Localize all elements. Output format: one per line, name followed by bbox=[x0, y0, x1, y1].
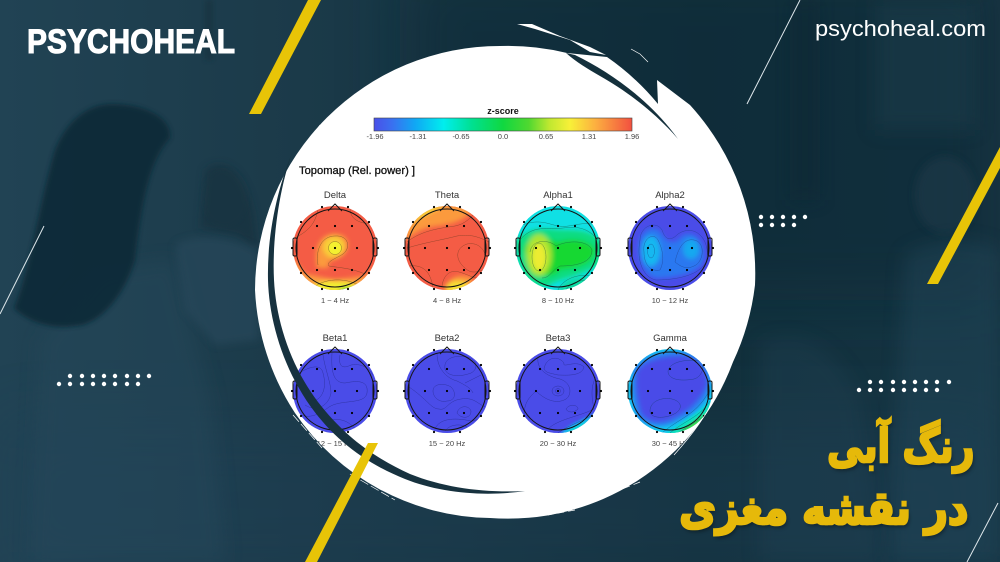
head: Gamma: 30 ~ 45 Hz bbox=[652, 439, 688, 448]
dots: right upper bbox=[759, 215, 807, 227]
head: Beta3: Beta3 bbox=[546, 333, 570, 344]
head: Gamma bbox=[626, 333, 716, 448]
heading: topomap: Topomap (Rel. power) ] bbox=[299, 165, 415, 177]
head: Beta1: Beta1 bbox=[323, 333, 347, 344]
head: Alpha2 bbox=[626, 190, 714, 305]
colour bar: z-score bbox=[366, 109, 639, 139]
brush stroke: lower left dark sweep bbox=[268, 153, 525, 494]
logo: PSYCHOHEAL: PSYCHOHEAL bbox=[27, 23, 235, 61]
head: Beta2: 15 ~ 20 Hz bbox=[429, 439, 465, 448]
head: Alpha1: Alpha1 bbox=[543, 190, 573, 201]
brush stroke: upper right dark sweep bbox=[566, 53, 678, 139]
head: Theta: 4 ~ 8 Hz bbox=[433, 296, 461, 305]
head: Alpha2: Alpha2 bbox=[655, 190, 685, 201]
head: Beta1 bbox=[291, 333, 379, 448]
head: Alpha1: 8 ~ 10 Hz bbox=[542, 296, 574, 305]
colour bar: z-score: -1.96 bbox=[366, 132, 384, 141]
white brush circle bbox=[255, 24, 755, 519]
head: Beta3: 20 ~ 30 Hz bbox=[540, 439, 576, 448]
head: Alpha1 bbox=[514, 190, 602, 305]
colour bar: z-score: -0.65 bbox=[452, 132, 470, 141]
colour bar: z-score: 1.31 bbox=[582, 132, 596, 141]
title: line 1: رنگ آبی bbox=[827, 419, 974, 473]
head: Delta: 1 ~ 4 Hz bbox=[321, 296, 349, 305]
title: line 2: در نقشه مغزی bbox=[679, 481, 968, 535]
head: Theta bbox=[403, 190, 491, 305]
infographic content clipped to the circle bbox=[291, 106, 716, 448]
website address: psychoheal.com bbox=[815, 16, 986, 41]
head: Beta1: 12 ~ 15 Hz bbox=[317, 439, 353, 448]
yellow diagonal bar: right bbox=[927, 147, 1000, 284]
dots: left bbox=[57, 374, 151, 386]
head: Theta: Theta bbox=[435, 190, 460, 201]
head: Delta: Delta bbox=[324, 190, 347, 201]
colour bar: z-score: z-score bbox=[487, 106, 519, 116]
colour bar: z-score: -1.31 bbox=[409, 132, 427, 141]
head: Beta3 bbox=[514, 333, 602, 448]
head: Delta bbox=[291, 190, 379, 305]
head: Alpha2: 10 ~ 12 Hz bbox=[652, 296, 688, 305]
colour bar: z-score: 1.96 bbox=[625, 132, 639, 141]
head: Beta2 bbox=[403, 333, 491, 448]
dots: right lower bbox=[857, 380, 951, 392]
colour bar: z-score: 0.65 bbox=[539, 132, 553, 141]
brush detail: fine white lines bbox=[293, 385, 722, 515]
colour bar: z-score: 0.0 bbox=[498, 132, 508, 141]
head: Beta2: Beta2 bbox=[435, 333, 459, 344]
yellow diagonal bar: bottom bbox=[305, 443, 378, 562]
head: Gamma: Gamma bbox=[653, 333, 688, 344]
yellow diagonal bar: top left bbox=[249, 0, 321, 114]
